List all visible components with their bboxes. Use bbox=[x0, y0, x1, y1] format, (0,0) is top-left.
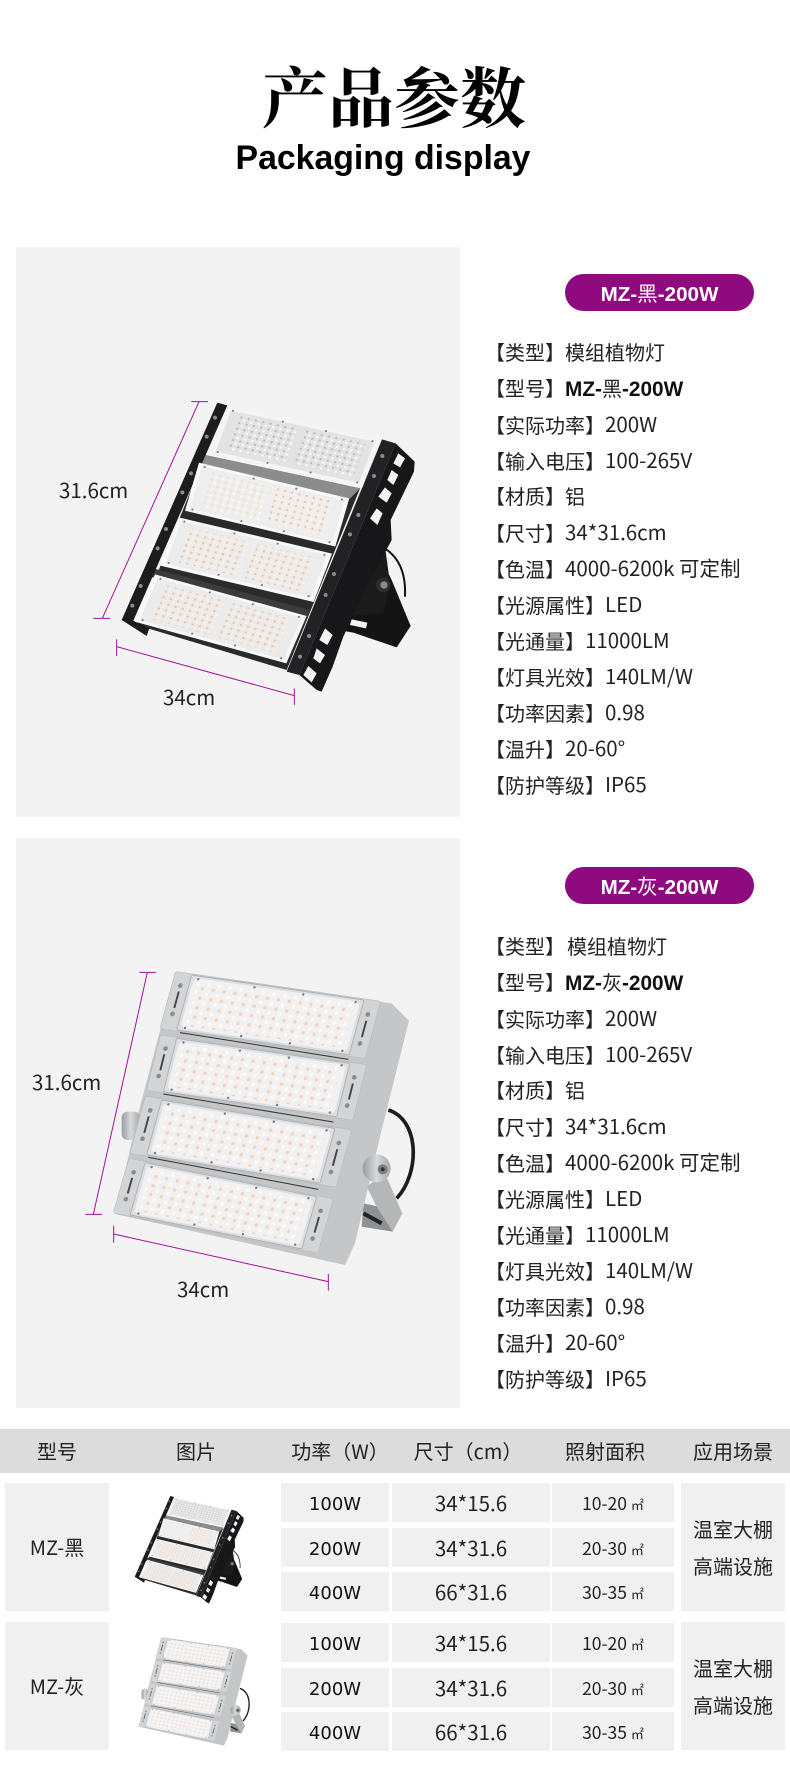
pill: black model: MZ-黑-200W bbox=[601, 277, 718, 307]
spec: power: 【实际功率】200W bbox=[485, 1002, 657, 1033]
spec: light source: 【光源属性】LED bbox=[485, 588, 642, 619]
spec: power: 【实际功率】200W bbox=[485, 408, 657, 439]
cell: area 30-35: 30-35 ㎡ bbox=[582, 1580, 644, 1605]
table header band bbox=[0, 1429, 790, 1473]
cell: size 66*31.6 bbox=[392, 1572, 550, 1611]
cell: model grey bbox=[5, 1622, 109, 1750]
cell: model black bbox=[5, 1483, 109, 1611]
cell: size 34*15.6: 34*15.6 bbox=[435, 1627, 507, 1657]
dimension: height bbox=[93, 402, 208, 618]
title: 产品参数 bbox=[262, 46, 526, 141]
cell: application grey: 高端设施 bbox=[693, 1690, 773, 1719]
spec: temperature rise: 【温升】20-60° bbox=[485, 732, 625, 763]
spec: protection: 【防护等级】IP65 bbox=[485, 1362, 647, 1393]
pill: grey model: MZ-灰-200W bbox=[601, 870, 718, 900]
cell: size 34*31.6: 34*31.6 bbox=[435, 1532, 507, 1562]
spec: material: 【材质】铝 bbox=[485, 481, 585, 510]
cell: power 100W: 100W bbox=[309, 1494, 361, 1515]
cell: model grey: MZ-灰 bbox=[30, 1671, 84, 1700]
cell: size 66*31.6 bbox=[392, 1712, 550, 1751]
cell: size 34*31.6: 34*31.6 bbox=[435, 1672, 507, 1702]
cell: power 400W: 400W bbox=[309, 1583, 361, 1604]
cell: power 100W: 100W bbox=[309, 1634, 361, 1655]
cell: power 100W bbox=[281, 1483, 389, 1522]
cell: area 30-35 bbox=[552, 1712, 674, 1751]
label: black lamp width: 34cm bbox=[163, 681, 215, 711]
cell: power 400W bbox=[281, 1712, 389, 1751]
icon: mini black lamp bbox=[134, 1496, 244, 1604]
cell: area 20-30: 20-30 ㎡ bbox=[582, 1676, 644, 1701]
spec: type: 【类型】模组植物灯 bbox=[485, 931, 667, 960]
spec list: black model bbox=[485, 337, 741, 799]
header: model: 型号 bbox=[37, 1436, 77, 1465]
cell: area 10-20: 10-20 ㎡ bbox=[582, 1491, 644, 1516]
cell: area 10-20: 10-20 ㎡ bbox=[582, 1631, 644, 1656]
cell: power 200W bbox=[281, 1528, 389, 1567]
spec: flux: 【光通量】11000LM bbox=[485, 1218, 670, 1249]
spec: type: 【类型】模组植物灯 bbox=[485, 337, 665, 366]
cell: area 30-35: 30-35 ㎡ bbox=[582, 1720, 644, 1745]
spec: size: 【尺寸】34*31.6cm bbox=[485, 516, 667, 547]
cell: area 20-30: 20-30 ㎡ bbox=[582, 1536, 644, 1561]
header: power: 功率（W） bbox=[291, 1436, 389, 1465]
cell: power 400W: 400W bbox=[309, 1723, 361, 1744]
icon: black lamp with dimension lines bbox=[93, 401, 415, 705]
panel: grey lamp background bbox=[16, 838, 460, 1408]
spec: model: 【型号】MZ-黑-200W bbox=[485, 373, 683, 402]
cell: size 34*31.6 bbox=[392, 1528, 550, 1567]
cell: power 200W: 200W bbox=[309, 1539, 361, 1560]
cell: area 30-35 bbox=[552, 1572, 674, 1611]
cell: application grey: 温室大棚 bbox=[693, 1653, 773, 1682]
spec: voltage: 【输入电压】100-265V bbox=[485, 444, 692, 475]
label: grey lamp height: 31.6cm bbox=[32, 1066, 101, 1096]
cell: application black: 温室大棚 bbox=[693, 1514, 773, 1543]
icon: mini grey lamp bbox=[138, 1637, 250, 1746]
header: picture: 图片 bbox=[176, 1436, 216, 1465]
cell: model black: MZ-黑 bbox=[30, 1532, 84, 1561]
label: grey lamp width: 34cm bbox=[177, 1273, 229, 1303]
cell: area 10-20 bbox=[552, 1623, 674, 1662]
header: size: 尺寸（cm） bbox=[414, 1436, 522, 1465]
panel: black lamp background bbox=[16, 247, 460, 817]
spec: efficacy: 【灯具光效】140LM/W bbox=[485, 660, 693, 691]
spec: power factor: 【功率因素】0.98 bbox=[485, 1290, 645, 1321]
subtitle: Packaging display bbox=[236, 139, 530, 177]
cell: size 34*15.6 bbox=[392, 1623, 550, 1662]
cell: size 66*31.6: 66*31.6 bbox=[435, 1576, 507, 1606]
spec: light source: 【光源属性】LED bbox=[485, 1182, 642, 1213]
cell: application black: 高端设施 bbox=[693, 1551, 773, 1580]
spec: temperature rise: 【温升】20-60° bbox=[485, 1326, 625, 1357]
spec: voltage: 【输入电压】100-265V bbox=[485, 1038, 692, 1069]
cell: area 10-20 bbox=[552, 1483, 674, 1522]
header: area: 照射面积 bbox=[565, 1436, 645, 1465]
cell: size 34*15.6: 34*15.6 bbox=[435, 1487, 507, 1517]
dimension: width bbox=[117, 639, 294, 705]
cell: area 20-30 bbox=[552, 1528, 674, 1567]
cell: power 400W bbox=[281, 1572, 389, 1611]
cell: size 34*31.6 bbox=[392, 1668, 550, 1707]
spec: colour temperature: 【色温】4000-6200k 可定制 bbox=[485, 1146, 741, 1177]
spec: flux: 【光通量】11000LM bbox=[485, 624, 670, 655]
dimension: width bbox=[114, 1226, 328, 1291]
spec: efficacy: 【灯具光效】140LM/W bbox=[485, 1254, 693, 1285]
spec: size: 【尺寸】34*31.6cm bbox=[485, 1110, 667, 1141]
dimension: height bbox=[85, 972, 156, 1214]
cell: power 100W bbox=[281, 1623, 389, 1662]
pill: black model bbox=[565, 274, 754, 311]
label: black lamp height: 31.6cm bbox=[59, 474, 128, 504]
cell: application grey bbox=[681, 1622, 785, 1750]
cell: application black bbox=[681, 1483, 785, 1611]
header: application: 应用场景 bbox=[693, 1436, 773, 1465]
cell: power 200W bbox=[281, 1668, 389, 1707]
cell: size 34*15.6 bbox=[392, 1483, 550, 1522]
spec list: grey model bbox=[485, 931, 741, 1393]
spec: power factor: 【功率因素】0.98 bbox=[485, 696, 645, 727]
spec: protection: 【防护等级】IP65 bbox=[485, 768, 647, 799]
cell: area 20-30 bbox=[552, 1668, 674, 1707]
icon: grey lamp with dimension lines bbox=[85, 971, 416, 1291]
cell: power 200W: 200W bbox=[309, 1679, 361, 1700]
pill: grey model bbox=[565, 867, 754, 904]
spec: material: 【材质】铝 bbox=[485, 1075, 585, 1104]
spec: model: 【型号】MZ-灰-200W bbox=[485, 967, 683, 996]
spec: colour temperature: 【色温】4000-6200k 可定制 bbox=[485, 552, 741, 583]
cell: size 66*31.6: 66*31.6 bbox=[435, 1716, 507, 1746]
